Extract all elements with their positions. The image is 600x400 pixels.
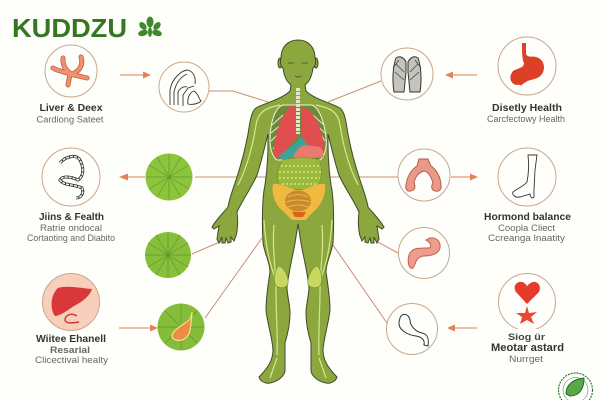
arrow: digestive to lungs [445, 72, 477, 78]
arrow: leaf to joints [119, 174, 145, 180]
icon: leaf disc with organ [158, 304, 204, 350]
panel: liver [35, 274, 109, 365]
pink organ [293, 145, 323, 159]
panel: joints and health [27, 148, 115, 243]
icon: pancreas circle [398, 228, 450, 278]
arrow: heart to shape [447, 324, 477, 332]
icon: stomach [510, 43, 544, 85]
ribcage [270, 105, 326, 160]
badge: green certification seal [558, 373, 592, 400]
panel: heart and nutrient [491, 274, 564, 364]
panel: heart and nutrient: Meotar astard [491, 342, 564, 354]
panel: liver and detox: Liver & Deex [40, 102, 103, 114]
panel: hormonal balance: Coopla Cliect [498, 223, 556, 233]
panel: joints and health: Jiins & Fealth [39, 211, 104, 223]
icon: kudzu leaf [137, 16, 163, 37]
panel: digestive health: Disetly Health [492, 102, 562, 114]
panel: joints and health: Cortaoting and Diabito [27, 233, 115, 243]
icon: hooded outline circle [159, 62, 209, 112]
panel: joints and health: Ratrie ondocal [40, 223, 102, 233]
human body figure [212, 40, 384, 383]
title: KUDDZU [12, 13, 127, 43]
teal organ [278, 137, 309, 161]
knees [274, 266, 322, 288]
connector lines [192, 81, 398, 323]
panel: digestive health: Carcfectowy Health [487, 114, 565, 124]
icon: pelvis outline circle [398, 149, 450, 201]
panel: hormonal balance [484, 148, 571, 243]
panel: hormonal balance: Ccreanga lnaatity [488, 233, 566, 243]
arrow: liver to hood [120, 72, 151, 78]
pelvis [273, 184, 325, 220]
lower intestine [285, 190, 311, 217]
panel: heart and nutrient: Nurrget [509, 354, 544, 364]
icon: foot outline [513, 155, 537, 198]
spine [296, 88, 300, 134]
icon: heart [515, 282, 540, 304]
panel: liver and detox: Cardiong Sateet [36, 114, 104, 124]
icon: liver [52, 287, 92, 323]
light meridian lines [238, 105, 358, 378]
icon: green leaf disc 1 [146, 154, 192, 200]
panel: heart and nutrient: Siog ür [508, 332, 546, 342]
panel: hormonal balance: Hormond balance [484, 211, 571, 223]
panel: liver: Clicectival healty [35, 355, 109, 365]
icon: star figure [516, 306, 537, 324]
lungs [274, 105, 324, 159]
icon: green leaf disc 2 [145, 232, 191, 278]
panel: liver: Wiitee Ehanell [36, 333, 106, 345]
arrow: pelvis to foot [451, 174, 478, 180]
intestines [278, 158, 321, 189]
panel: liver: Resarial [50, 345, 90, 355]
panel: liver and detox [36, 45, 104, 124]
white label backing [500, 329, 554, 332]
face [288, 63, 308, 77]
arrow: liver to leaf [119, 324, 158, 332]
panel: digestive health [487, 37, 565, 124]
icon: wavy shape circle [386, 304, 438, 354]
icon: horseshoe organ [53, 57, 87, 85]
icon: intestine line art [60, 156, 83, 198]
body silhouette [212, 40, 384, 383]
icon: lungs outline circle [381, 48, 433, 100]
